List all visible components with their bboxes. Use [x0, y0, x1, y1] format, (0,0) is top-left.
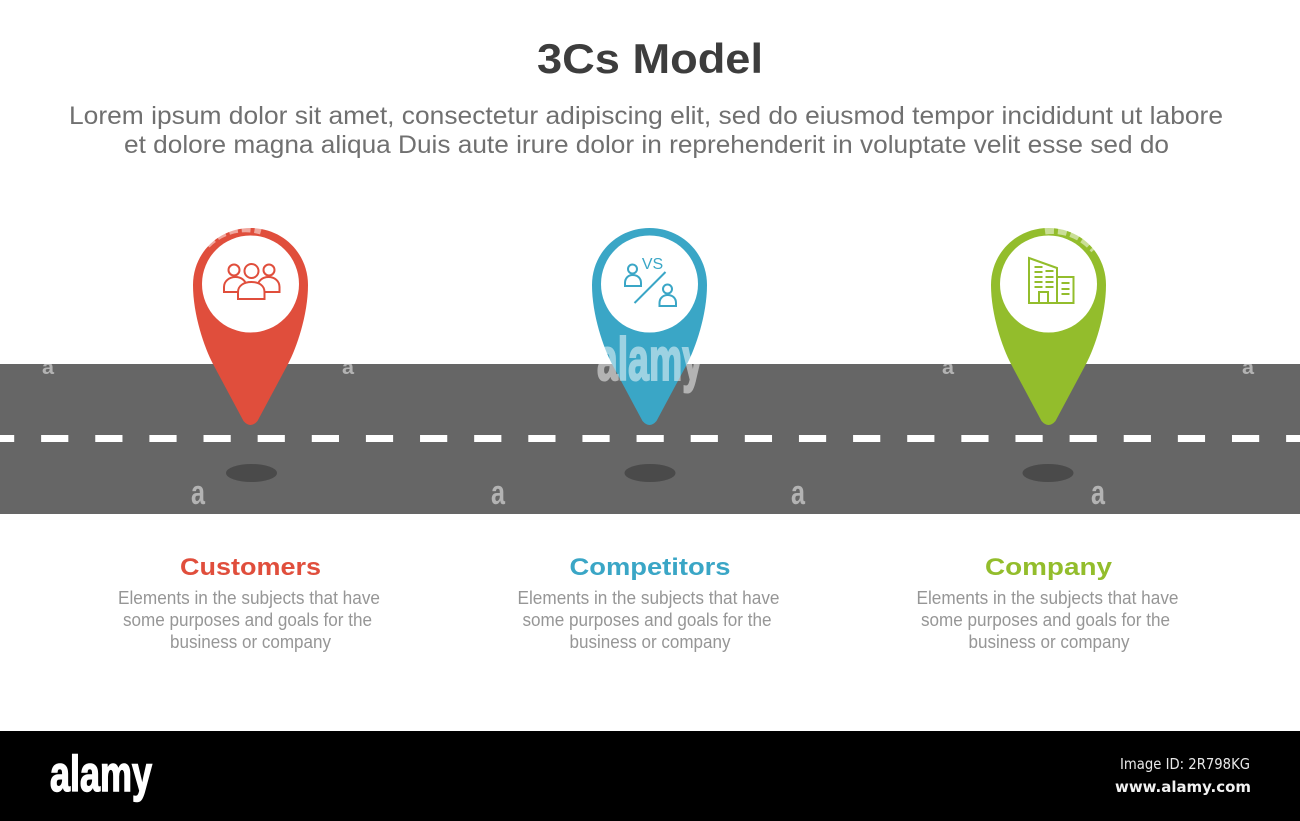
watermark: alamy	[597, 326, 703, 393]
watermark: a	[1091, 474, 1106, 512]
road	[0, 364, 1300, 514]
description: customers: business or company	[170, 632, 331, 652]
label: competitors: Competitors	[570, 554, 730, 581]
pin: company	[991, 228, 1106, 425]
label: customers: Customers	[180, 554, 321, 581]
intro text: Lorem ipsum dolor sit amet, consectetur adipiscing elit, sed do eiusmod tempor incididunt ut labore	[69, 102, 1223, 130]
description: company	[916, 588, 1178, 652]
label: company: Company	[985, 554, 1113, 581]
description: customers: Elements in the subjects that have	[118, 588, 380, 608]
watermark: a	[1242, 357, 1255, 379]
icon: person versus person	[625, 256, 676, 306]
description: customers: some purposes and goals for the	[123, 610, 372, 630]
description: competitors: Elements in the subjects that have	[518, 588, 780, 608]
pin: customers	[193, 228, 308, 425]
label: customers	[118, 554, 380, 652]
watermark: a	[491, 474, 506, 512]
description: company: business or company	[968, 632, 1130, 652]
watermark: a	[791, 474, 806, 512]
label: company	[916, 554, 1178, 652]
website: www.alamy.com	[1115, 778, 1251, 796]
footer bar	[0, 731, 1300, 821]
watermark: a	[942, 357, 955, 379]
title: 3Cs Model	[537, 35, 763, 82]
icon: office buildings	[1029, 258, 1074, 303]
watermark: a	[342, 357, 355, 379]
icon: people group	[224, 264, 280, 299]
intro text	[69, 102, 1223, 159]
description: company: some purposes and goals for the	[921, 610, 1170, 630]
pin: competitors	[592, 228, 707, 425]
description: competitors	[518, 588, 780, 652]
intro text: et dolore magna aliqua Duis aute irure dolor in reprehenderit in voluptate velit esse sed do	[124, 131, 1169, 159]
icon: person versus person: VS	[642, 256, 663, 273]
image id: Image ID: 2R798KG	[1120, 755, 1250, 773]
description: competitors: some purposes and goals for the	[522, 610, 772, 630]
description: customers	[118, 588, 380, 652]
label: competitors	[518, 554, 780, 652]
footer logo: alamy	[50, 746, 152, 802]
watermark: a	[42, 357, 55, 379]
description: company: Elements in the subjects that have	[916, 588, 1178, 608]
watermark: a	[191, 474, 206, 512]
watermark	[42, 229, 1255, 512]
pin shadows	[226, 464, 1074, 482]
description: competitors: business or company	[570, 632, 730, 652]
